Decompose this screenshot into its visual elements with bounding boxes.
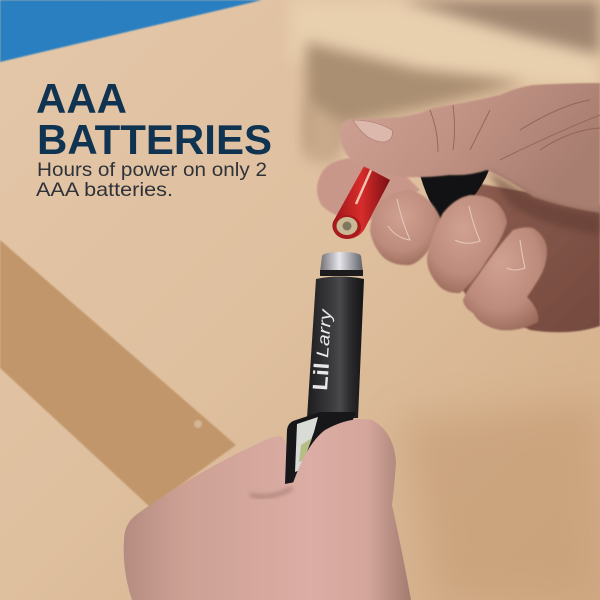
blurred cardboard stack [290, 0, 600, 165]
lower hand fingers behind flashlight [124, 436, 300, 600]
upper hand [317, 83, 600, 332]
flashlight clip and work light [285, 412, 356, 484]
index fingertip [370, 190, 440, 265]
rear index finger [317, 158, 420, 220]
flashlight barrel [307, 276, 364, 418]
speck on tape [194, 420, 202, 428]
subheading [36, 159, 267, 201]
blue background corner [0, 0, 262, 62]
flashlight [285, 252, 364, 484]
battery terminal [333, 215, 361, 239]
middle fingertip [427, 195, 507, 293]
brown tape strip [0, 240, 236, 507]
red AAA battery [332, 166, 390, 239]
flashlight brand lettering: Lil [309, 362, 334, 391]
fingernails [388, 199, 525, 270]
flashlight: Larry [313, 307, 335, 358]
subheading: AAA batteries. [36, 179, 173, 201]
headline: BATTERIES [37, 116, 272, 163]
flashlight silver cap [320, 252, 363, 272]
thumbnail [353, 120, 392, 142]
lower hand thumb [180, 419, 411, 600]
ring fingertip [463, 227, 547, 330]
black battery cap held in fingers [418, 168, 490, 222]
thumb and back of hand [340, 83, 600, 213]
crease between thumb and finger [250, 488, 292, 496]
subheading: Hours of power on only 2 [37, 159, 267, 181]
knuckle creases [430, 100, 600, 160]
shadow under thumb [487, 171, 600, 235]
headline [36, 75, 272, 163]
palm and knuckle base [430, 175, 600, 332]
headline: AAA [36, 75, 127, 122]
